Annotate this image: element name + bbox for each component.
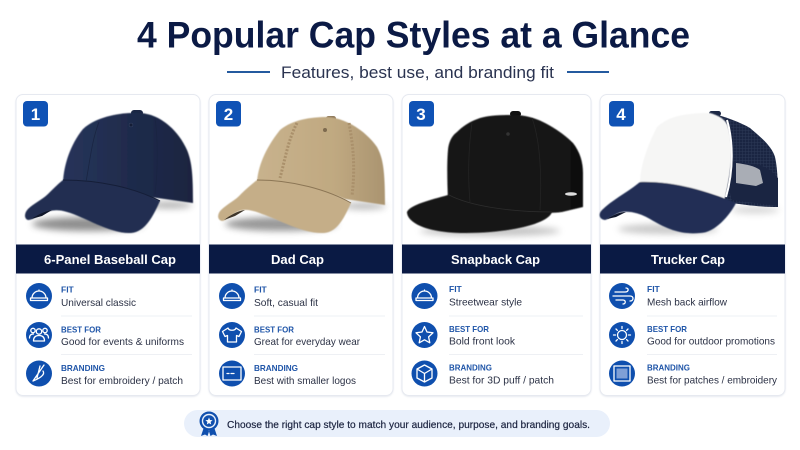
header: Trucker Cap: Trucker Cap (651, 252, 725, 267)
image: trucker cap with mesh back (600, 111, 779, 234)
header: Snapback Cap (402, 244, 591, 274)
header: Snapback Cap: Snapback Cap (451, 252, 540, 267)
branding row (609, 360, 778, 386)
best for row: BEST FOR (61, 324, 101, 334)
image: navy baseball cap (25, 110, 193, 233)
fit row (26, 283, 136, 309)
callout: footer message (184, 410, 610, 437)
panel: Trucker Cap (600, 94, 785, 396)
header: Dad Cap: Dad Cap (271, 252, 324, 267)
number badge 1 (23, 101, 48, 126)
panel: Dad Cap (209, 94, 393, 396)
best for row (26, 322, 184, 348)
panel: 6-Panel Baseball Cap (16, 94, 200, 396)
fit row: Soft, casual fit (254, 297, 318, 309)
branding row: Best for embroidery / patch (61, 375, 183, 387)
number badge 2 (216, 101, 241, 126)
branding row (412, 360, 554, 386)
fit row (412, 283, 522, 309)
header: 6-Panel Baseball Cap (16, 244, 200, 274)
fit row: FIT (61, 284, 75, 294)
number badge 4: 4 (616, 105, 626, 124)
fit row: Universal classic (61, 297, 136, 309)
best for row (609, 322, 775, 348)
branding row: BRANDING (647, 362, 690, 372)
number badge 2: 2 (224, 105, 233, 124)
title: 4 Popular Cap Styles at a Glance (137, 14, 690, 56)
best for row: BEST FOR (254, 324, 294, 334)
branding row: Best for 3D puff / patch (449, 374, 554, 386)
best for row: Great for everyday wear (254, 336, 360, 348)
number badge 3: 3 (416, 105, 426, 124)
icon: award ribbon (200, 412, 218, 436)
branding row: BRANDING (449, 362, 492, 372)
branding row: BRANDING (61, 363, 105, 373)
fit row: Streetwear style (449, 296, 522, 308)
image: black snapback cap (407, 111, 583, 236)
best for row: BEST FOR (449, 324, 489, 334)
fit row (219, 283, 318, 309)
branding row: BRANDING (254, 363, 298, 373)
branding row: Best for patches / embroidery (647, 374, 778, 386)
branding row (26, 360, 183, 387)
best for row: Bold front look (449, 336, 516, 348)
subtitle: Features, best use, and branding fit (281, 63, 554, 82)
fit row: FIT (647, 284, 661, 294)
number badge 3 (409, 101, 434, 126)
fit row (609, 283, 727, 309)
best for row: Good for outdoor promotions (647, 336, 775, 348)
best for row (219, 322, 360, 348)
branding row (219, 360, 356, 387)
number badge 4 (609, 101, 634, 126)
fit row: Mesh back airflow (647, 296, 727, 308)
callout: footer message: Choose the right cap style to match your audience, purpose, and branding goals. (227, 419, 590, 431)
branding row: Best with smaller logos (254, 375, 356, 387)
header: Trucker Cap (600, 244, 785, 274)
fit row: FIT (254, 284, 268, 294)
image: khaki dad cap (218, 116, 386, 233)
best for row: BEST FOR (647, 324, 687, 334)
best for row: Good for events & uniforms (61, 336, 184, 348)
best for row (412, 322, 516, 348)
number badge 1: 1 (31, 105, 40, 124)
fit row: FIT (449, 284, 463, 294)
header: Dad Cap (209, 244, 393, 274)
header: 6-Panel Baseball Cap: 6-Panel Baseball Cap (44, 252, 176, 267)
panel: Snapback Cap (402, 94, 591, 396)
